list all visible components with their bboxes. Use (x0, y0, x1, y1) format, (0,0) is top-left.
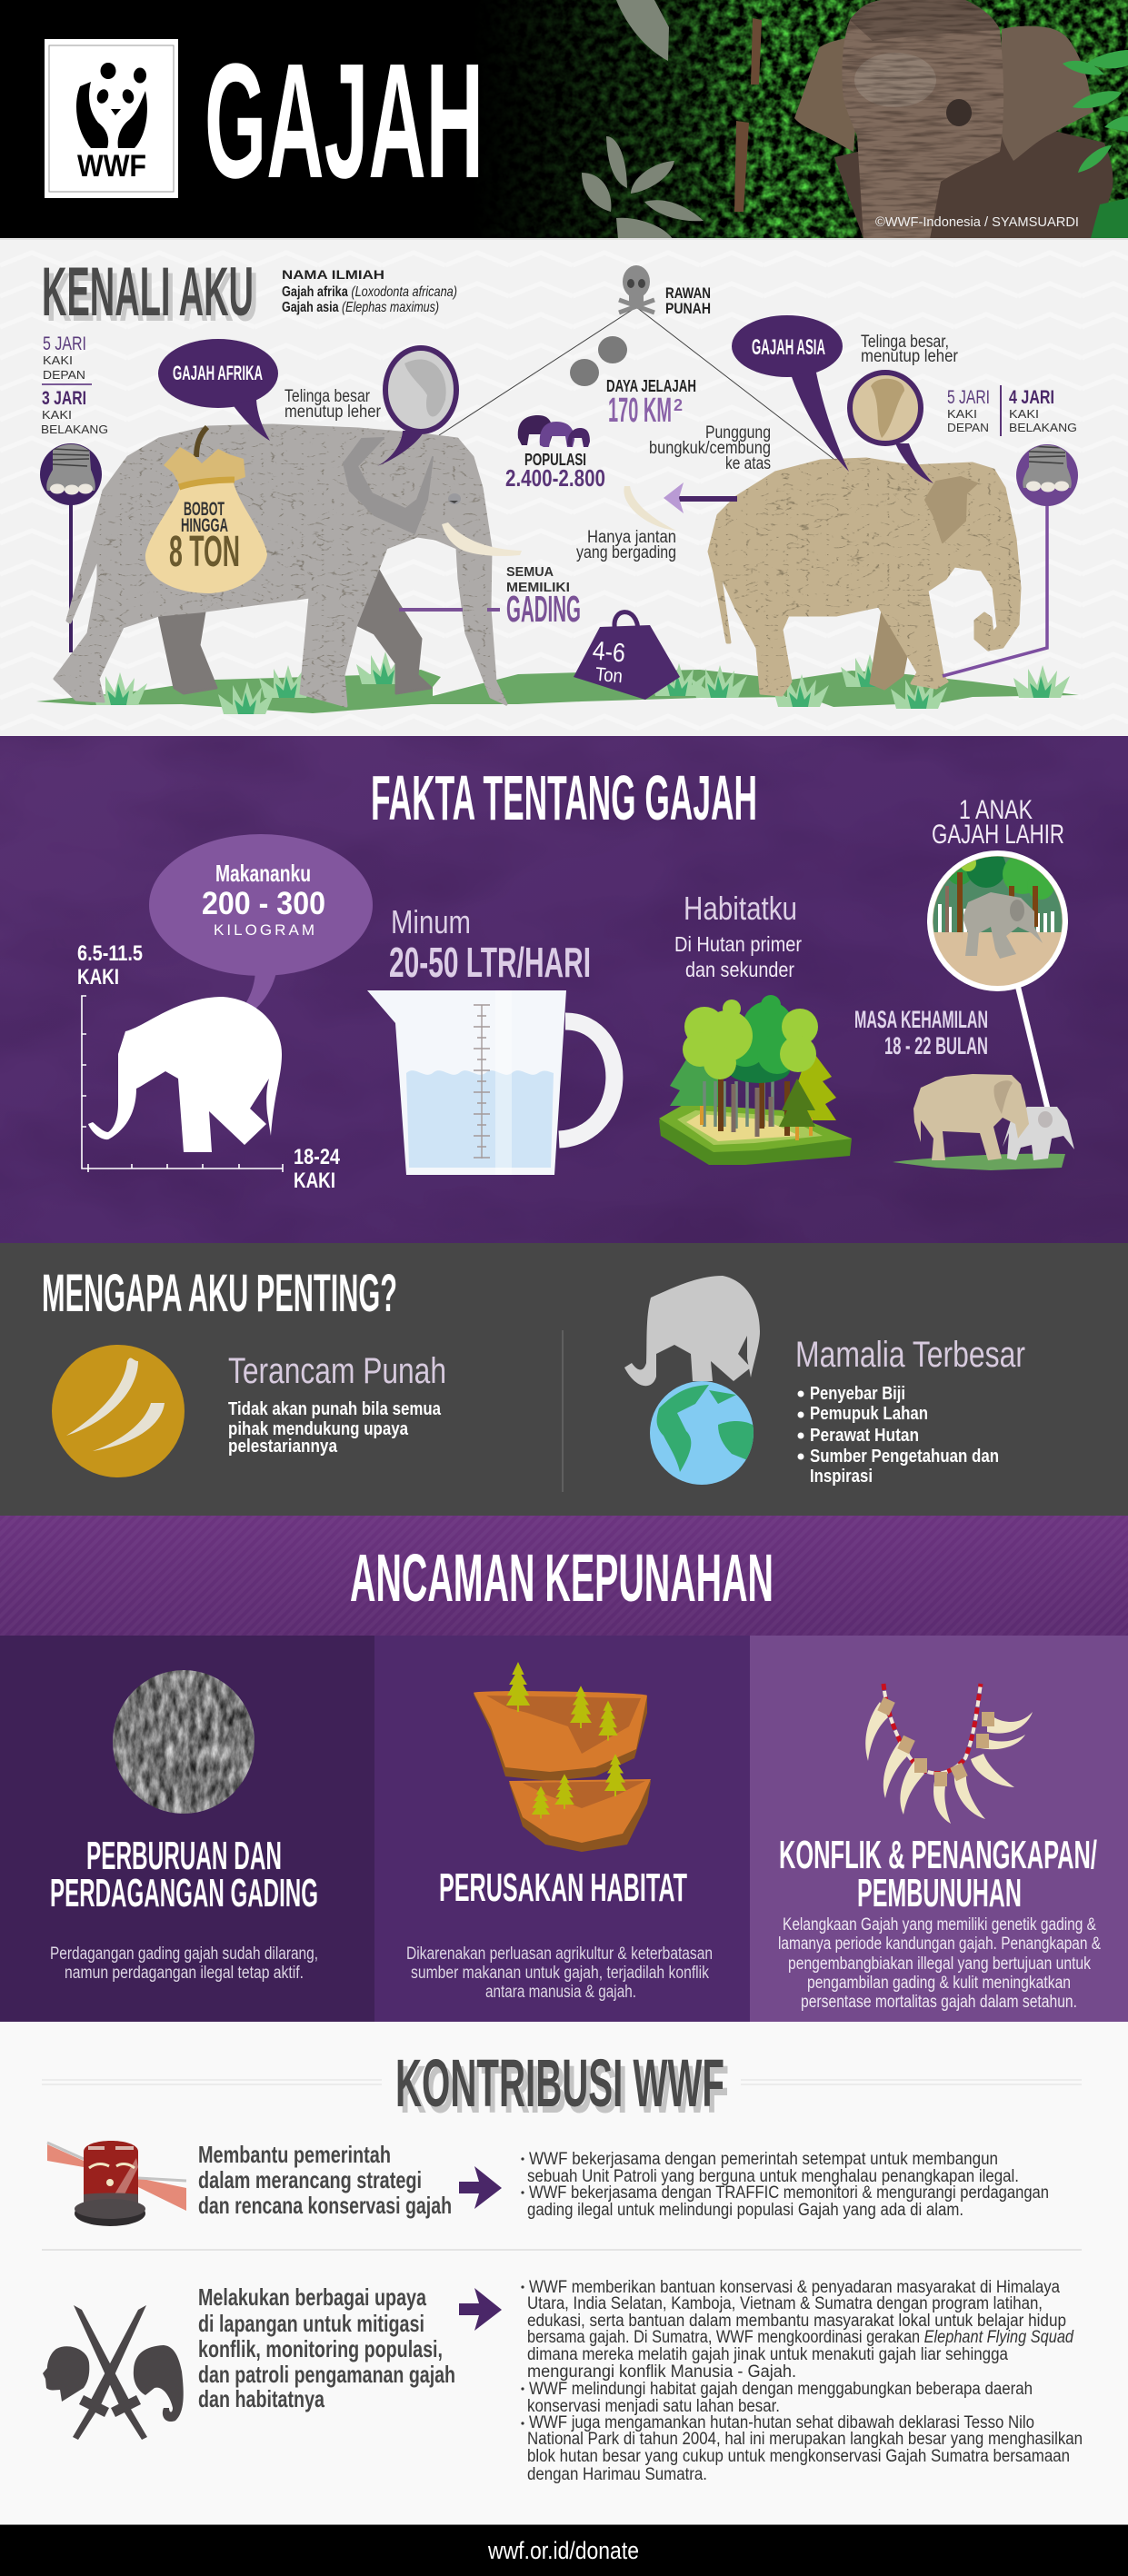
text: mitigation: dan patroli pengamanan gajah (198, 2361, 455, 2388)
heading: KENALI AKU (42, 254, 254, 331)
terancam punah text (228, 1351, 446, 1457)
bullet list 2: WWF memberikan bantuan konservasi & penyadaran masyarakat di Himalaya (529, 2278, 1060, 2297)
note: punggung: bungkuk/cembung (649, 439, 771, 458)
panel: ancaman kepunahan header (0, 1516, 1128, 1636)
terancam punah text: pihak mendukung upaya (228, 1419, 409, 1439)
size axes (82, 996, 283, 1172)
heading: KONTRIBUSI WWF (395, 2045, 724, 2121)
bubble: gajah afrika: GAJAH AFRIKA (173, 362, 263, 384)
daya jelajah: DAYA JELAJAH (606, 377, 696, 395)
right fingers text: 4 JARI (1009, 387, 1054, 408)
habitat text: dan sekunder (685, 958, 794, 981)
habitat text (674, 890, 802, 981)
heading: KENALI AKU (46, 259, 258, 336)
label: length: 18-24 (294, 1145, 341, 1169)
panel: kontribusi wwf (0, 2022, 1128, 2525)
text: mitigation: Melakukan berbagai upaya (198, 2283, 426, 2311)
right fingers text: KAKI (1009, 407, 1039, 421)
icon: white elephant (88, 997, 282, 1152)
note: punggung: ke atas (725, 454, 771, 473)
left fingers text: 5 JARI (43, 333, 86, 354)
bullet list 2: mengurangi konflik Manusia - Gajah. (527, 2362, 796, 2382)
left fingers text: DEPAN (43, 368, 85, 382)
semua memiliki gading (506, 564, 581, 630)
grass tufts (91, 651, 1070, 714)
mamalia terbesar text: Mamalia Terbesar (795, 1335, 1025, 1375)
arrow (459, 2166, 502, 2209)
label: rawan punah: PUNAH (665, 300, 711, 317)
scientific names: NAMA ILMIAH (282, 267, 384, 282)
mamalia terbesar text: Sumber Pengetahuan dan (810, 1447, 999, 1467)
tan elephant (709, 459, 1020, 695)
note: telinga asia: menutup leher (861, 347, 959, 366)
right fingers text: 5 JARI (947, 387, 990, 408)
bullet list 1: WWF bekerjasama dengan TRAFFIC memonitori & mengurangi perdagangan (529, 2183, 1049, 2203)
icon: skull (619, 265, 654, 313)
left fingers text: BELAKANG (41, 423, 108, 436)
body text (778, 1915, 1101, 2012)
bullet list 2: bersama gajah. Di Sumatra, WWF mengkoordinasi gerakan Elephant Flying Squad (527, 2328, 1074, 2347)
bag: 8 ton: BOBOT (184, 499, 225, 520)
terancam punah text: Tidak akan punah bila semua (228, 1399, 442, 1419)
tusk line (399, 608, 500, 612)
icon: WWF panda logo: WWF (77, 149, 146, 184)
daya jelajah (606, 377, 696, 430)
baby elephant label (932, 795, 1064, 850)
photo: forest and elephant (473, 0, 1128, 239)
text: mitigation: di lapangan untuk mitigasi (198, 2310, 424, 2337)
panel: perburuan (0, 1636, 374, 2022)
bubble: makananku: KILOGRAM (214, 921, 314, 939)
text: masa kehamilan: MASA KEHAMILAN (854, 1006, 988, 1033)
minum (389, 903, 591, 986)
body text: Dikarenakan perluasan agrikultur & keterbatasan (406, 1944, 713, 1964)
label: length: KAKI (294, 1169, 335, 1193)
body text (50, 1944, 318, 1983)
daya jelajah: 170 KM (608, 392, 672, 430)
baby elephant label: 1 ANAK (959, 795, 1033, 825)
right fingers text (947, 385, 1077, 436)
scientific names (282, 267, 457, 315)
heading: PERBURUAN DAN (86, 1834, 282, 1878)
bag: 8 ton (145, 427, 267, 593)
arrow: back feature (664, 482, 737, 513)
label: length (294, 1145, 341, 1193)
panel: header: GAJAH (205, 30, 484, 213)
height label (77, 941, 143, 990)
heading: PERUSAKAN HABITAT (439, 1865, 687, 1910)
bullet list 1 (521, 2150, 1049, 2220)
note: hanya jantan: yang bergading (576, 543, 676, 562)
semua memiliki gading: MEMILIKI (506, 580, 570, 595)
left fingers text: 3 JARI (42, 388, 86, 409)
elephant body (834, 131, 1113, 238)
daya jelajah: 2 (674, 396, 683, 414)
icon: tusk necklace (865, 1684, 1033, 1824)
tusk (442, 522, 522, 556)
scientific names: Gajah afrika (Loxodonta africana) (282, 284, 457, 300)
semua memiliki gading: SEMUA (506, 564, 554, 580)
heading: FAKTA TENTANG GAJAH (371, 762, 757, 833)
bullet list 2 (521, 2278, 1083, 2484)
text: mitigation (198, 2283, 455, 2412)
heading (50, 1834, 318, 1915)
bullet list 2: dimana mereka melatih gajah jinak untuk menakuti gajah liar sehingga (527, 2345, 1008, 2364)
populasi: POPULASI (524, 451, 586, 469)
bubble: gajah asia: GAJAH ASIA (752, 335, 825, 360)
divider (562, 1330, 564, 1492)
callout: asian ear (850, 373, 933, 483)
bullet list 1: sebuah Unit Patroli yang berguna untuk menghalau penangkapan ilegal. (527, 2167, 1019, 2186)
left fingers text: KAKI (42, 408, 72, 422)
icon: elephant skin (109, 1667, 259, 1817)
text: strategy: dalam merancang strategi (198, 2166, 422, 2193)
terancam punah text: Terancam Punah (228, 1351, 446, 1391)
heading: MENGAPA AKU PENTING? (42, 1264, 397, 1323)
elephant head (842, 0, 1003, 239)
semua memiliki gading: GADING (506, 588, 581, 630)
mamalia terbesar text: Penyebar Biji (810, 1384, 905, 1404)
terancam punah text: pelestariannya (228, 1437, 338, 1457)
icon: tusks on gold (52, 1345, 185, 1477)
heading: KONTRIBUSI WWF (400, 2052, 729, 2127)
divider (42, 2249, 1082, 2251)
icon: measuring jug (367, 990, 614, 1175)
panel: mengapa aku penting (0, 1243, 1128, 1516)
right fingers text: KAKI (947, 407, 977, 421)
body text: sumber makanan untuk gajah, terjadilah konflik (411, 1964, 709, 1983)
icon: elephant herd (518, 415, 590, 447)
note: telinga afrika: Telinga besar (284, 387, 371, 406)
heading: PERDAGANGAN GADING (50, 1871, 318, 1915)
icon: footprints (570, 336, 627, 386)
right fingers text: BELAKANG (1009, 421, 1077, 434)
heading (42, 254, 258, 336)
note: punggung (649, 423, 771, 473)
icon: mother and calf (893, 1074, 1074, 1170)
baby elephant label: GAJAH LAHIR (932, 820, 1064, 850)
weight: 4-6 ton (574, 612, 680, 700)
left fingers text: KAKI (43, 353, 73, 367)
note: telinga asia (861, 333, 959, 366)
heading (42, 2045, 1082, 2127)
bag: 8 ton: HINGGA (181, 515, 228, 536)
elephant ear left (794, 38, 859, 152)
label: rawan punah: RAWAN (665, 284, 711, 302)
panel: konflik (750, 1636, 1128, 2022)
elephant ear right (1000, 26, 1093, 161)
bag: 8 ton: 8 TON (169, 528, 240, 576)
body text: antara manusia & gajah. (485, 1983, 636, 2002)
height label: 6.5-11.5 (77, 941, 143, 966)
callout: african ear (377, 348, 456, 466)
icon: swords, face, elephant (43, 2305, 184, 2440)
text: strategy: dan rencana konservasi gajah (198, 2192, 452, 2219)
african elephant (55, 425, 522, 706)
right foot callout (943, 440, 1078, 676)
bubble: makananku (149, 834, 373, 1027)
ground (36, 670, 1079, 713)
minum: Minum (391, 903, 471, 940)
populasi (505, 451, 605, 492)
body text: persentase mortalitas gajah dalam setahun. (801, 1993, 1077, 2012)
body text (406, 1944, 713, 2002)
text: mitigation: dan habitatnya (198, 2385, 324, 2412)
text: masa kehamilan: 18 - 22 BULAN (884, 1032, 988, 1059)
text: mitigation: konflik, monitoring populasi, (198, 2335, 443, 2362)
height label: KAKI (77, 965, 119, 990)
credit: ©WWF-Indonesia / SYAMSUARDI (875, 214, 1079, 230)
bubble: makananku: 200 - 300 (202, 886, 325, 921)
note: punggung: Punggung (705, 423, 771, 443)
bubble: gajah asia (732, 315, 849, 472)
bullet list 2: blok hutan besar yang cukup untuk mengkonservasi Gajah Sumatra bersamaan (527, 2447, 1070, 2466)
weight: 4-6 ton: 4-6 (592, 636, 626, 669)
note: hanya jantan: Hanya jantan (587, 528, 676, 547)
bullet list 2: WWF juga mengamankan hutan-hutan sehat dibawah deklarasi Tesso Nilo (529, 2413, 1034, 2432)
icon: fragmented islands (474, 1662, 651, 1852)
note: telinga asia: Telinga besar, (861, 333, 949, 352)
mamalia terbesar text: Perawat Hutan (810, 1426, 919, 1446)
body text: namun perdagangan ilegal tetap aktif. (65, 1964, 304, 1983)
note: telinga afrika (284, 387, 382, 422)
icon: small tusk (624, 486, 676, 531)
ear (925, 477, 977, 542)
text: masa kehamilan (854, 1006, 988, 1059)
left fingers text (41, 333, 108, 436)
bubble: makananku: Makananku (215, 860, 311, 887)
bullet list 2: Utara, India Selatan, Kamboja, Vietnam & Sumatra dengan program latihan, (527, 2294, 1043, 2313)
mamalia terbesar text (795, 1335, 1025, 1487)
panel: fakta tentang gajah (0, 736, 1128, 1243)
note: hanya jantan (576, 528, 676, 562)
text: strategy (198, 2141, 452, 2219)
icon: elephant on globe (624, 1276, 760, 1485)
label: rawan punah (665, 284, 711, 317)
elephant ear (344, 438, 433, 533)
icon: siren (47, 2141, 186, 2226)
callout: newborn circle (927, 848, 1073, 1110)
panel: header (0, 0, 1128, 239)
habitat text: Habitatku (684, 890, 797, 927)
panel: perusakan habitat (374, 1636, 750, 2022)
bullet list 2: konservasi menjadi satu lahan besar. (527, 2397, 780, 2416)
mamalia terbesar text: Pemupuk Lahan (810, 1404, 928, 1424)
bullet list 1: gading ilegal untuk melindungi populasi Gajah yang ada di alam. (527, 2201, 963, 2220)
minum: 20-50 LTR/HARI (389, 939, 591, 986)
body text: Perdagangan gading gajah sudah dilarang, (50, 1944, 318, 1964)
heading (779, 1833, 1097, 1915)
habitat text: Di Hutan primer (674, 932, 802, 956)
bullet list 2: edukasi, serta bantuan dalam membantu masyarakat lokal untuk belajar hidup (527, 2312, 1066, 2331)
panel: footer: wwf.or.id/donate (487, 2537, 639, 2564)
mamalia terbesar text: Inspirasi (810, 1467, 873, 1487)
bullet list 1: WWF bekerjasama dengan pemerintah setempat untuk membangun (529, 2150, 998, 2169)
bubble: gajah afrika (158, 339, 278, 441)
triangle lines (439, 307, 834, 459)
icon: WWF panda logo (45, 39, 178, 198)
icon: forest (659, 995, 852, 1165)
right foreground leaves (1063, 50, 1128, 173)
text: strategy: Membantu pemerintah (198, 2141, 391, 2168)
populasi: 2.400-2.800 (505, 464, 605, 492)
weight: 4-6 ton: Ton (594, 664, 624, 687)
bullet list 2: WWF melindungi habitat gajah dengan menggabungkan beberapa daerah (529, 2380, 1033, 2399)
note: telinga afrika: menutup leher (284, 403, 382, 422)
body text: pengambilan gading & kulit meningkatkan (807, 1974, 1071, 1993)
panel: ancaman kepunahan header: ANCAMAN KEPUNAHAN (350, 1540, 774, 1616)
right fingers text: DEPAN (947, 421, 989, 434)
bullet list 2: dengan Harimau Sumatra. (527, 2465, 707, 2484)
panel: kenali aku (0, 238, 1128, 736)
panel: footer (0, 2524, 1128, 2576)
arrow (459, 2288, 502, 2331)
scientific names: Gajah asia (Elephas maximus) (282, 300, 439, 315)
left foot callout (40, 443, 102, 652)
